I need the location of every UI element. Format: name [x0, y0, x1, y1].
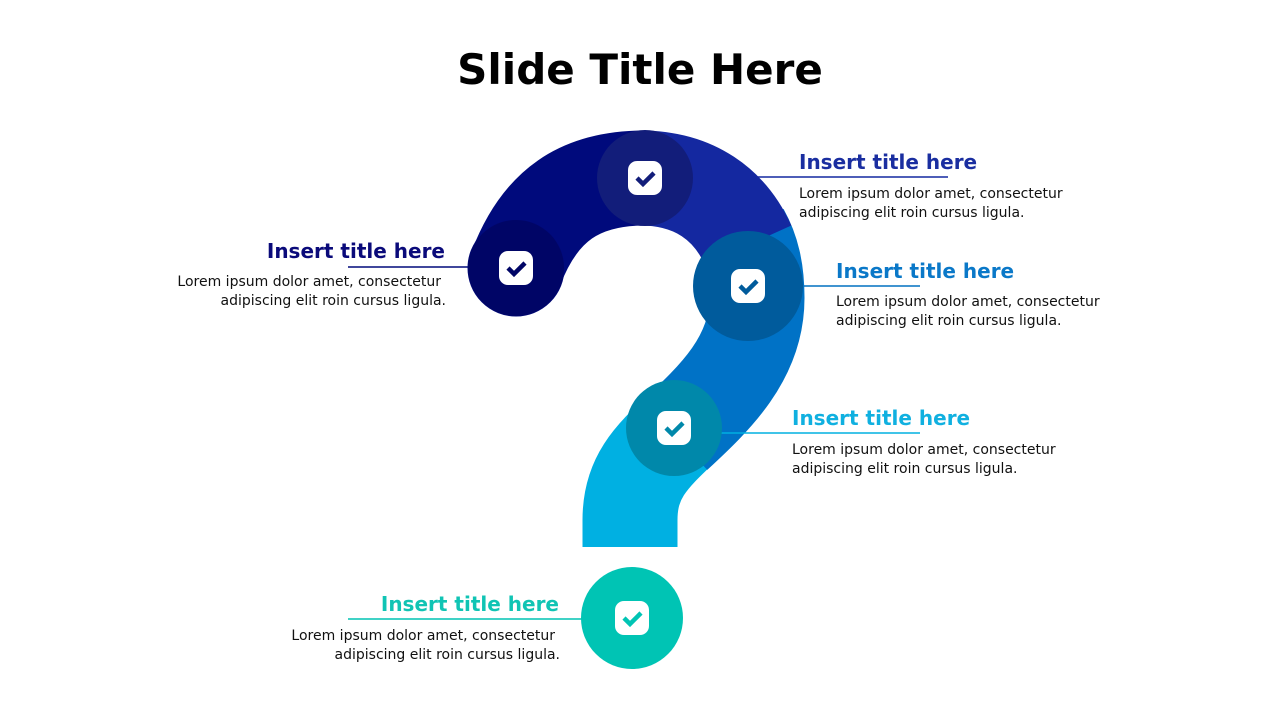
- text block: top right: [799, 150, 1063, 221]
- text block: middle right: [836, 259, 1100, 329]
- text block: top right: adipiscing elit roin cursus ligula.: [799, 205, 1024, 221]
- icon: check 1 left: [468, 220, 564, 316]
- text block: bottom left: adipiscing elit roin cursus ligula.: [335, 647, 560, 663]
- text block: left: Lorem ipsum dolor amet, consectetur: [177, 274, 441, 290]
- text block: lower right: Insert title here: [792, 406, 970, 430]
- text block: bottom left: Insert title here: [381, 592, 559, 616]
- text block: left: Insert title here: [267, 239, 445, 263]
- text block: middle right: Lorem ipsum dolor amet, consectetur: [836, 294, 1100, 310]
- text block: left: [177, 239, 446, 309]
- icon: check 4 lower: [626, 380, 722, 476]
- text block: middle right: adipiscing elit roin cursus ligula.: [836, 313, 1061, 329]
- title: Slide Title Here: [457, 45, 823, 94]
- question mark shape: [515, 178, 757, 547]
- text block: lower right: [792, 406, 1056, 477]
- text block: left: adipiscing elit roin cursus ligula.: [221, 293, 446, 309]
- text block: lower right: adipiscing elit roin cursus ligula.: [792, 461, 1017, 477]
- text block: top right: Insert title here: [799, 150, 977, 174]
- text block: bottom left: Lorem ipsum dolor amet, consectetur: [291, 628, 555, 644]
- text block: middle right: Insert title here: [836, 259, 1014, 283]
- icon: check 3 right: [693, 231, 803, 341]
- connector lines: [348, 177, 948, 619]
- text block: top right: Lorem ipsum dolor amet, consectetur: [799, 186, 1063, 202]
- icon: check 2 top: [597, 130, 693, 226]
- text block: bottom left: [291, 592, 560, 663]
- icon: check 5 dot: [581, 567, 683, 669]
- text block: lower right: Lorem ipsum dolor amet, consectetur: [792, 442, 1056, 458]
